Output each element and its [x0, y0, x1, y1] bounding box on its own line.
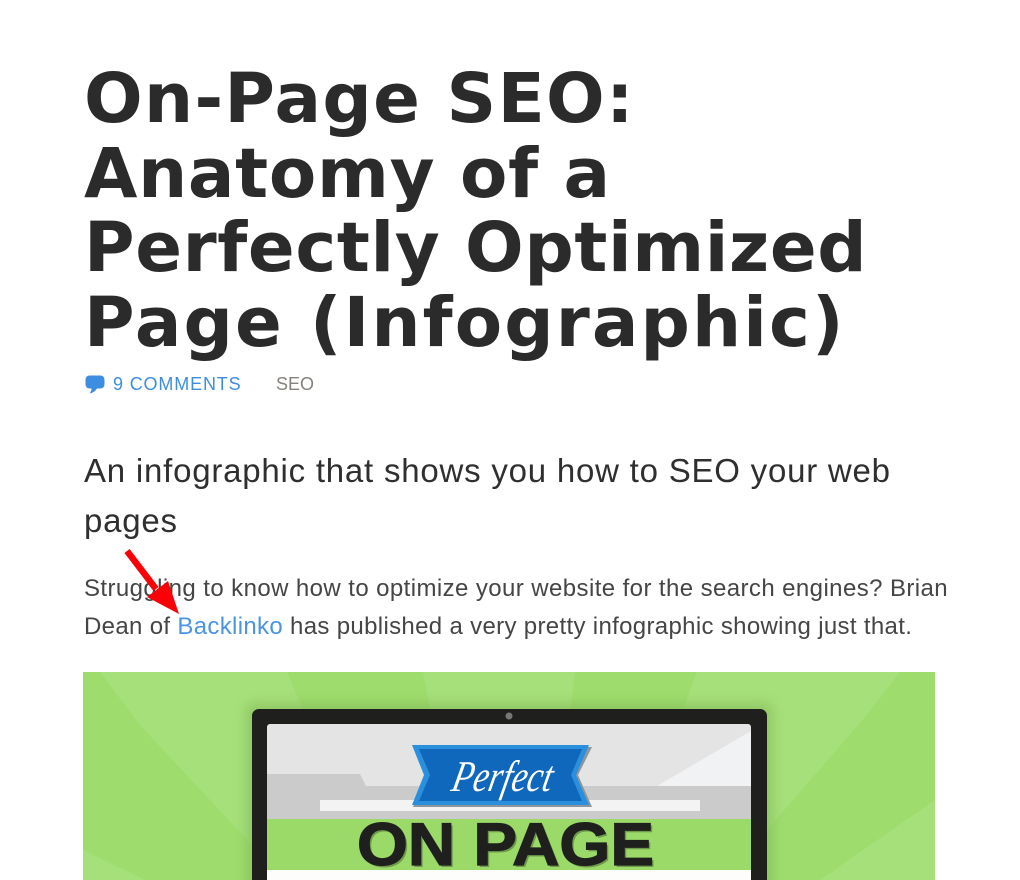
subtitle: An infographic that shows you how to SEO your web [84, 452, 891, 489]
arrow: red pointer [124, 549, 179, 614]
paragraph: Dean of Backlinko has published a very pretty infographic showing just that. [84, 613, 912, 640]
infographic preview image [83, 672, 935, 880]
paragraph [84, 575, 948, 640]
ribbon banner [412, 745, 592, 807]
subtitle: pages [84, 502, 178, 539]
laptop frame [252, 709, 767, 880]
icon: comment bubble [86, 376, 104, 394]
comments link: 9 COMMENTS [113, 374, 242, 394]
ribbon banner: Perfect [447, 751, 560, 801]
heading: on page: ON PAGE [357, 811, 654, 878]
title: Page (Infographic) [84, 283, 846, 363]
subtitle [84, 452, 891, 539]
paragraph: Struggling to know how to optimize your website for the search engines? Brian [84, 575, 948, 602]
category: SEO [276, 374, 314, 394]
screen [267, 724, 751, 880]
title: On-Page SEO: [84, 59, 635, 139]
title [84, 59, 867, 363]
green sunburst background [83, 672, 935, 880]
meta row [86, 374, 314, 394]
heading: on page: ON PAGE [359, 813, 656, 880]
title: Anatomy of a [84, 134, 611, 214]
title: Perfectly Optimized [84, 208, 867, 288]
